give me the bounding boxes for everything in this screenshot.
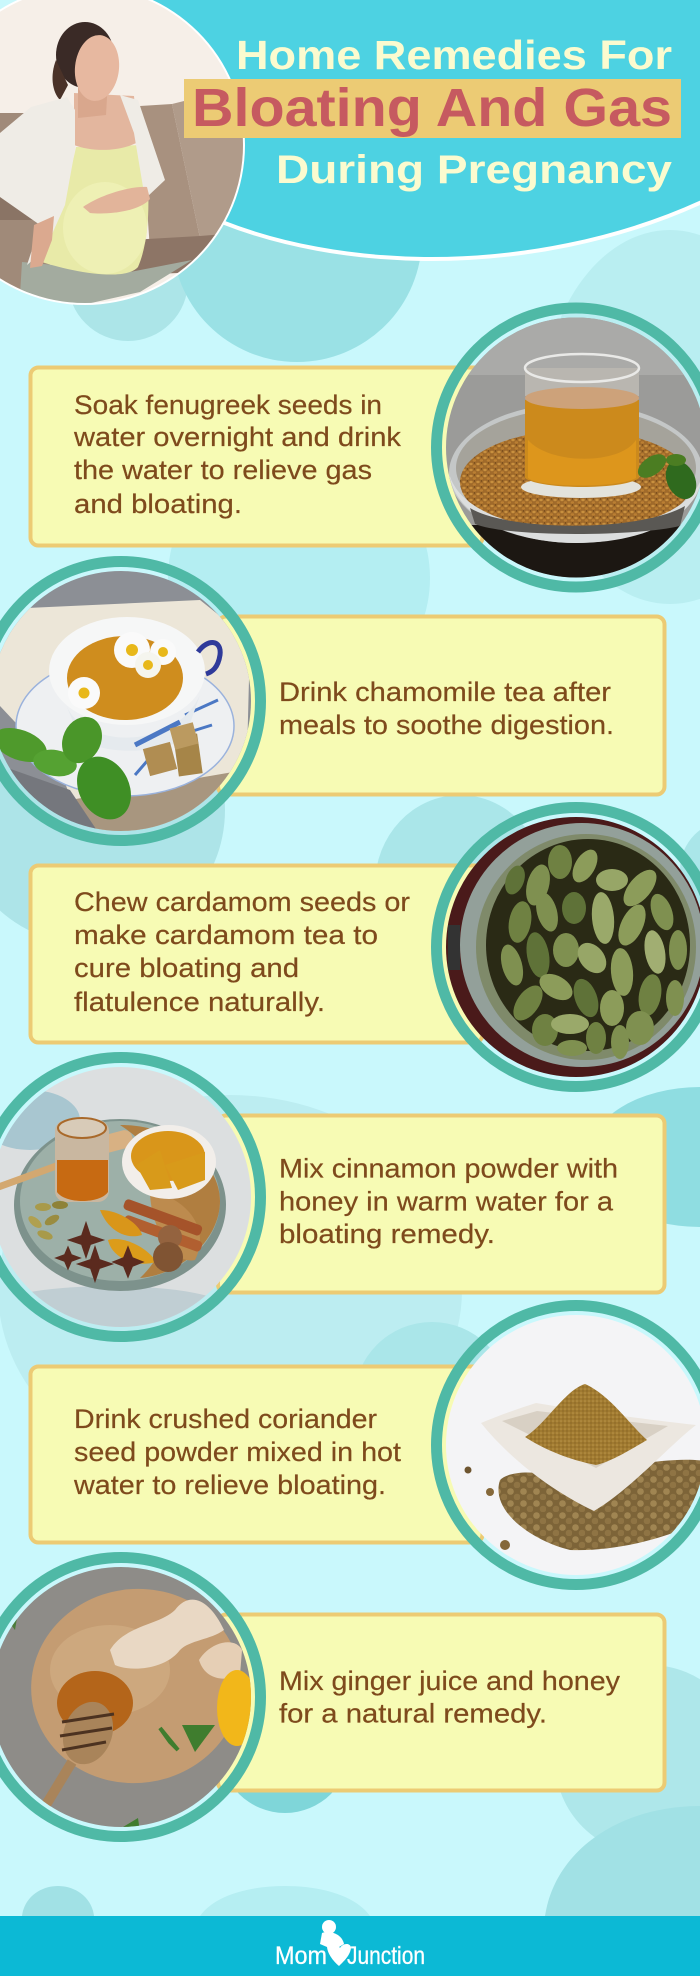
header banner xyxy=(90,0,700,259)
card: cinnamon text xyxy=(218,1116,664,1292)
card: cardamom text: make cardamom tea to xyxy=(74,920,378,950)
card: cinnamon text: Mix cinnamon powder with xyxy=(279,1154,618,1184)
card: coriander text xyxy=(30,1366,482,1542)
card: coriander text: Drink crushed coriander xyxy=(74,1404,377,1434)
card: coriander text: seed powder mixed in hot xyxy=(74,1437,402,1467)
title line 1: Home Remedies For xyxy=(236,32,672,78)
photo: pregnant woman xyxy=(0,0,245,305)
title line 3: During Pregnancy xyxy=(276,148,673,192)
logo: MomJunction: Mom xyxy=(275,1942,327,1970)
panel: coriander xyxy=(30,1306,700,1584)
photo: coriander powder xyxy=(436,1306,700,1584)
panel: chamomile xyxy=(0,562,664,840)
card: fenugreek text xyxy=(30,368,482,546)
card: cinnamon text: honey in warm water for a xyxy=(279,1186,614,1216)
card: cardamom text xyxy=(30,866,482,1042)
photo: spices and honey xyxy=(0,1058,260,1336)
photo: fenugreek water xyxy=(436,308,700,590)
card: fenugreek text: the water to relieve gas xyxy=(74,455,372,485)
title xyxy=(184,32,681,192)
card: chamomile text: meals to soothe digestion. xyxy=(279,710,614,740)
card: fenugreek text: water overnight and drink xyxy=(73,422,402,452)
footer bar xyxy=(0,1916,700,1976)
ring xyxy=(436,1306,700,1584)
panel: cinnamon xyxy=(0,1058,664,1336)
panel: cardamom xyxy=(30,808,700,1086)
ring xyxy=(0,562,260,840)
card: fenugreek text: Soak fenugreek seeds in xyxy=(74,390,382,420)
card: cardamom text: cure bloating and xyxy=(74,953,299,983)
title highlight bar: Bloating And Gas xyxy=(192,78,672,138)
ring xyxy=(436,808,700,1086)
ring xyxy=(0,1558,260,1836)
card: chamomile text xyxy=(218,616,664,794)
card: ginger text xyxy=(218,1614,664,1790)
logo: MomJunction xyxy=(275,1920,425,1970)
card: chamomile text: Drink chamomile tea after xyxy=(279,677,611,707)
panel: fenugreek xyxy=(30,308,700,590)
photo: ginger and honey xyxy=(0,1558,260,1836)
card: cardamom text: flatulence naturally. xyxy=(74,987,325,1017)
ring xyxy=(0,1058,260,1336)
logo icon xyxy=(320,1920,351,1966)
panel: ginger xyxy=(0,1558,664,1836)
card: ginger text: for a natural remedy. xyxy=(279,1698,547,1728)
photo: chamomile tea xyxy=(0,562,260,840)
card: ginger text: Mix ginger juice and honey xyxy=(279,1666,621,1696)
photo: cardamom jar xyxy=(436,808,700,1086)
logo: MomJunction: Junction xyxy=(347,1942,425,1970)
card: fenugreek text: and bloating. xyxy=(74,489,242,519)
card: cinnamon text: bloating remedy. xyxy=(279,1219,495,1249)
card: coriander text: water to relieve bloating. xyxy=(73,1470,386,1500)
card: cardamom text: Chew cardamom seeds or xyxy=(74,887,410,917)
ring xyxy=(436,308,700,587)
